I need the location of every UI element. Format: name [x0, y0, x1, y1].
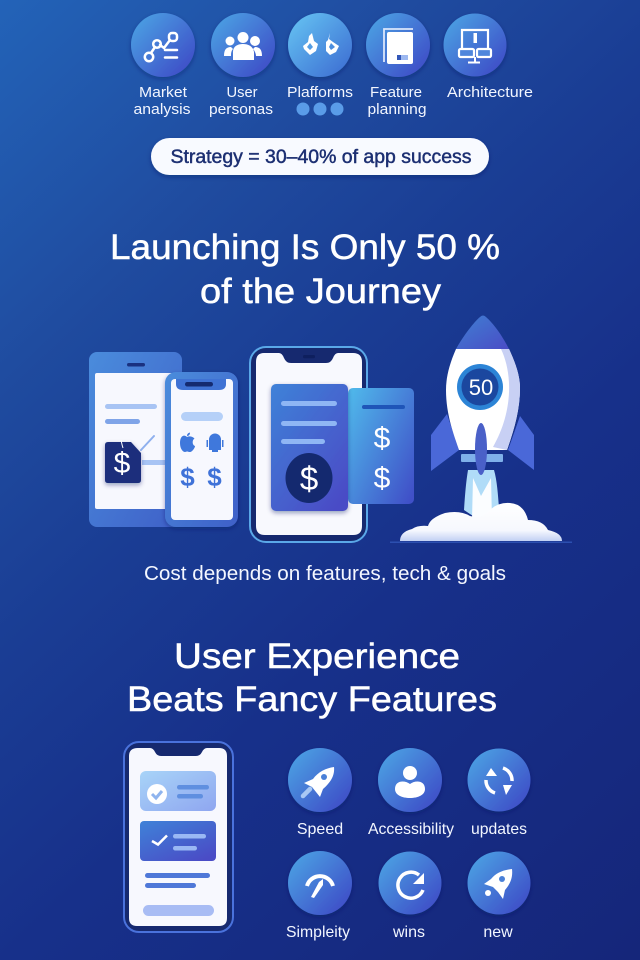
- item: accessibility: [368, 748, 454, 838]
- label: feature planning: Feature: [370, 84, 422, 101]
- heading: user experience: Beats Fancy Features: [127, 680, 497, 719]
- label: platforms with dots: Plafforms: [287, 84, 353, 101]
- item: updates: [468, 748, 530, 838]
- item: simplicity: Simpleity: [286, 924, 350, 941]
- flame: [464, 470, 499, 516]
- item: accessibility: Accessibility: [368, 821, 454, 838]
- label: platforms with dots: [287, 84, 353, 116]
- item: speed: [288, 748, 352, 838]
- label: architecture: Architecture: [447, 84, 533, 101]
- caption: cost: Cost depends on features, tech & goals: [144, 563, 506, 585]
- label: user personas: User: [226, 84, 258, 101]
- card: selected: [140, 821, 216, 861]
- item: simplicity: [286, 851, 352, 941]
- window: 50: [469, 375, 493, 400]
- phone: platforms and cost: $: [207, 462, 222, 492]
- label: feature planning: planning: [368, 101, 426, 118]
- window: [457, 364, 503, 410]
- phone: budget cards: [250, 347, 414, 542]
- label: feature planning: [368, 84, 426, 118]
- heading: launching: [110, 228, 500, 311]
- item: speed: Speed: [297, 821, 343, 838]
- callout: strategy pill: Strategy = 30–40% of app success: [170, 147, 472, 168]
- rocket body: [446, 349, 520, 450]
- item: new: [468, 852, 530, 941]
- item: wins: [378, 852, 442, 941]
- label: user personas: [209, 84, 273, 118]
- heading: launching: of the Journey: [200, 272, 442, 311]
- label: market analysis: Market: [139, 84, 188, 101]
- heading: launching: Launching Is Only 50 %: [110, 228, 500, 267]
- button: [143, 905, 214, 916]
- phone: price tag: $: [114, 447, 131, 480]
- ux icon grid: [286, 748, 530, 941]
- phone: budget cards: $: [374, 462, 391, 495]
- heading: user experience: User Experience: [174, 637, 460, 676]
- icon: user personas: [211, 13, 275, 77]
- item: new: new: [483, 924, 513, 941]
- icon: market analysis: [131, 13, 195, 77]
- icon: apple: [180, 432, 195, 452]
- ground line: [390, 542, 572, 543]
- icon: platforms: [288, 13, 352, 77]
- phone: price tag: [89, 352, 182, 527]
- text lines: [145, 873, 210, 878]
- cloud: [400, 503, 562, 541]
- strategy icon row: [131, 13, 533, 118]
- illustration: cost phones: [89, 347, 414, 542]
- label: market analysis: [134, 84, 190, 118]
- heading: user experience: [127, 637, 497, 719]
- card: light: [140, 771, 216, 811]
- nozzle base: [461, 454, 503, 462]
- phone: budget cards: $: [300, 460, 318, 497]
- phone: platforms and cost: $: [180, 462, 195, 492]
- phone: platforms and cost: [165, 372, 238, 527]
- callout: strategy pill: [151, 138, 489, 175]
- fins: [431, 414, 534, 471]
- icon: android: [206, 434, 224, 452]
- icon: feature planning: [366, 13, 430, 77]
- item: wins: wins: [392, 924, 425, 941]
- item: updates: updates: [471, 821, 527, 838]
- center fin: [475, 423, 487, 475]
- nose: [456, 316, 509, 349]
- illustration: rocket launch: [390, 316, 572, 543]
- illustration: ux phone: [124, 742, 233, 932]
- icon: architecture: [444, 14, 506, 76]
- phone: budget cards: $: [374, 422, 391, 455]
- label: user personas: personas: [209, 101, 273, 118]
- label: market analysis: analysis: [134, 101, 190, 118]
